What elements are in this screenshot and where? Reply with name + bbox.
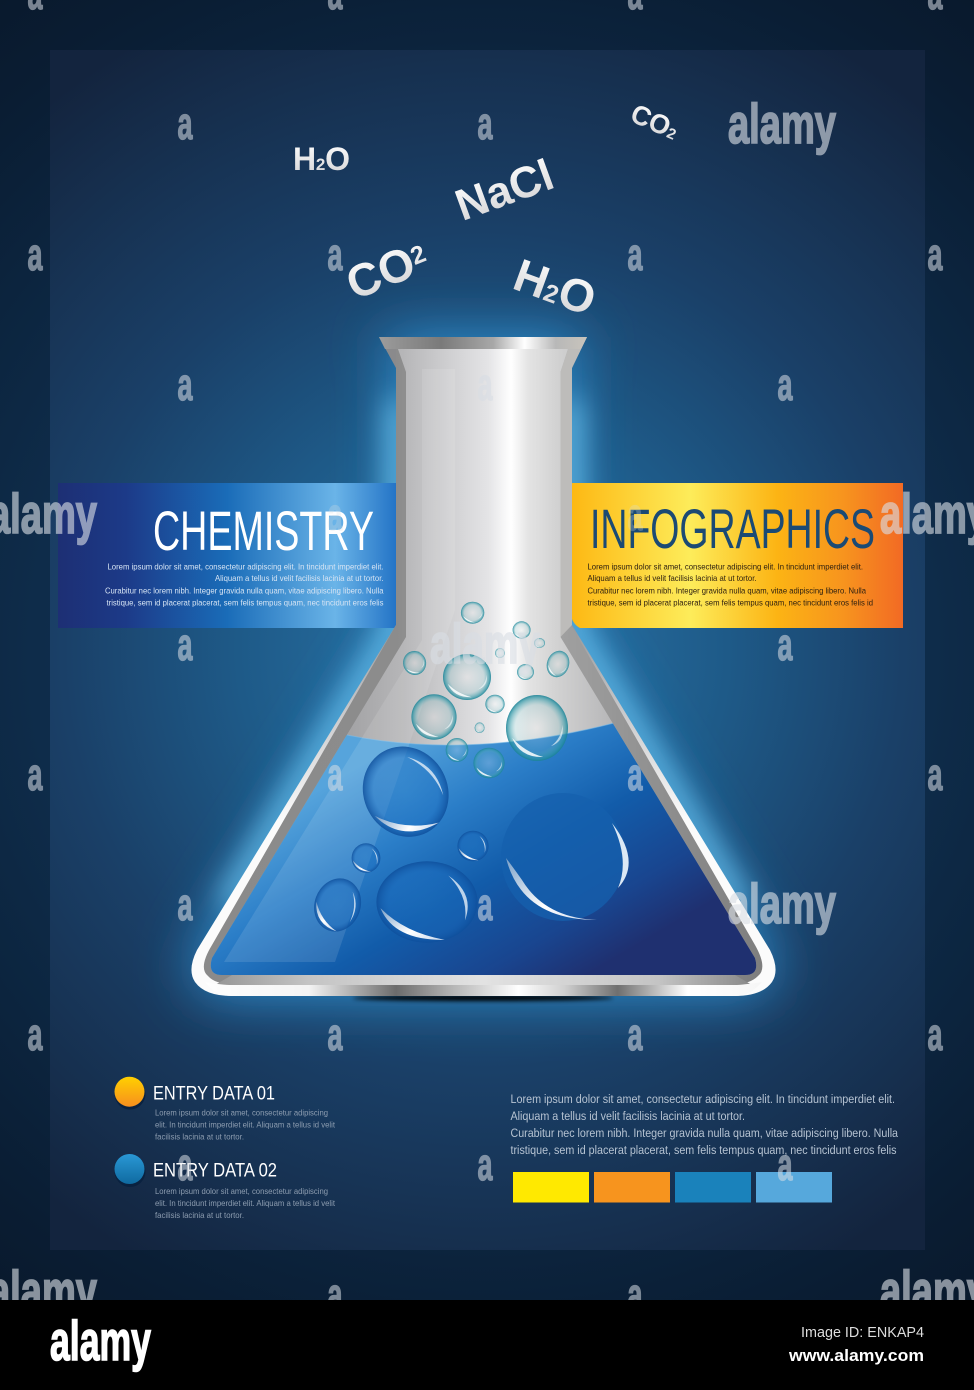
footer url: www.alamy.com [788, 1346, 924, 1365]
watermark tiles: a [328, 1269, 343, 1320]
formula: H2O large: H2O [507, 248, 603, 326]
watermark tiles: a [778, 619, 793, 670]
text block: chemistry description: Curabitur nec lorem nibh. Integer gravida nulla quam, vitae adipiscing libero. Nulla [105, 586, 384, 596]
watermark tiles: a [328, 229, 343, 280]
glass interior [210, 349, 756, 975]
liquid [210, 723, 756, 975]
text block: infographics description: Lorem ipsum dolor sit amet, consectetur adipiscing elit. In tincidunt imperdiet elit. [588, 562, 863, 572]
watermark tiles: a [328, 749, 343, 800]
image id: Image ID: ENKAP4 [801, 1324, 924, 1341]
watermark tiles: a [628, 489, 643, 540]
watermark tiles: a [928, 229, 943, 280]
watermark tiles: a [328, 489, 343, 540]
watermark tiles: a [778, 359, 793, 410]
legend: entry data 01: elit. In tincidunt imperdiet elit. Aliquam a tellus id velit [155, 1120, 336, 1130]
formula: CO2 small: CO2 [626, 98, 683, 146]
watermark tiles: a [478, 359, 493, 410]
formula: CO2 large: 2 [407, 240, 430, 271]
watermark tiles: a [28, 229, 43, 280]
watermark wordmarks: alamy [430, 612, 540, 675]
formula: CO2 large: CO [339, 236, 422, 310]
formula: H2O small: H2O [293, 141, 350, 177]
text block: bottom paragraph: tristique, sem id placerat placerat, sem felis tempus quam, nec tincidunt eros felis [510, 1143, 896, 1157]
text block: infographics description: Curabitur nec lorem nibh. Integer gravida nulla quam, vitae adipiscing libero. Nulla [588, 586, 866, 596]
watermark tiles: a [928, 1009, 943, 1060]
panel: chemistry banner [58, 483, 398, 628]
watermark tiles: a [628, 1009, 643, 1060]
text block: infographics description [588, 562, 873, 608]
flask shadow [353, 995, 613, 1001]
watermark tiles: a [178, 1139, 193, 1190]
text block: infographics description: tristique, sem id placerat placerat, sem felis tempus quam, nec tincidunt eros felis id [588, 598, 873, 608]
text block: bottom paragraph: Lorem ipsum dolor sit amet, consectetur adipiscing elit. In tincidunt imperdiet elit. [510, 1092, 895, 1106]
flask base band [205, 975, 762, 996]
text block: chemistry description [105, 562, 384, 608]
glass highlight [224, 710, 410, 962]
legend: entry data 02: ENTRY DATA 02 [153, 1161, 277, 1182]
watermark tiles: a [928, 749, 943, 800]
formula: NaCl: NaCl [449, 150, 560, 231]
legend: entry data 02 [114, 1154, 336, 1220]
legend: entry data 01: ENTRY DATA 01 [153, 1083, 275, 1104]
watermark tiles: a [628, 1269, 643, 1320]
legend: entry data 02: Lorem ipsum dolor sit amet, consectetur adipiscing [155, 1186, 328, 1196]
watermark wordmarks: alamy [728, 872, 836, 935]
watermark tiles: a [178, 359, 193, 410]
legend: entry data 02: elit. In tincidunt imperdiet elit. Aliquam a tellus id velit [155, 1198, 336, 1208]
text block: chemistry description: Aliquam a tellus id velit facilisis lacinia at ut tortor. [215, 573, 384, 583]
heading: chemistry: CHEMISTRY [153, 499, 374, 562]
flask rim [379, 337, 587, 349]
liquid surface edge [347, 723, 614, 745]
text block: bottom paragraph: Aliquam a tellus id velit facilisis lacinia at ut tortor. [510, 1109, 745, 1123]
inner panel [50, 50, 925, 1250]
colour swatches [513, 1172, 832, 1202]
legend: entry data 02: facilisis lacinia at ut tortor. [155, 1210, 244, 1220]
watermark tiles: a [178, 98, 193, 149]
watermark tiles: a [628, 229, 643, 280]
text block: infographics description: Aliquam a tellus id velit facilisis lacinia at ut tortor. [588, 573, 756, 583]
watermark wordmarks: alamy [728, 92, 836, 155]
watermark tiles: a [478, 98, 493, 149]
text block: chemistry description: tristique, sem id placerat placerat, sem felis tempus quam, nec tincidunt eros felis [106, 598, 384, 608]
text block: bottom paragraph: Curabitur nec lorem nibh. Integer gravida nulla quam, vitae adipiscing libero. Nulla [510, 1126, 898, 1140]
panel: infographics banner [570, 483, 903, 628]
large bubble [501, 793, 629, 921]
footer bar [0, 1300, 974, 1390]
legend: entry data 01: facilisis lacinia at ut tortor. [155, 1132, 244, 1142]
watermark tiles: a [328, 1009, 343, 1060]
footer logo: alamy [50, 1309, 151, 1372]
flask neck right shade [560, 337, 587, 637]
legend: entry data 01 [114, 1077, 336, 1142]
flask glow [191, 337, 776, 996]
bubbles in liquid [307, 731, 629, 943]
watermark tiles: a [478, 1139, 493, 1190]
bubbles above liquid [400, 602, 573, 778]
watermark tiles: a [778, 1139, 793, 1190]
flask [180, 337, 790, 996]
watermark tiles: a [178, 879, 193, 930]
text block: chemistry description: Lorem ipsum dolor sit amet, consectetur adipiscing elit. In tincidunt imperdiet elit. [108, 562, 384, 572]
watermark tiles: a [178, 619, 193, 670]
watermark tiles: a [28, 749, 43, 800]
watermark tiles: a [478, 879, 493, 930]
watermark tiles: a [28, 1009, 43, 1060]
text block: bottom paragraph [510, 1092, 898, 1157]
watermark tiles: a [628, 749, 643, 800]
legend: entry data 01: Lorem ipsum dolor sit amet, consectetur adipiscing [155, 1108, 328, 1118]
